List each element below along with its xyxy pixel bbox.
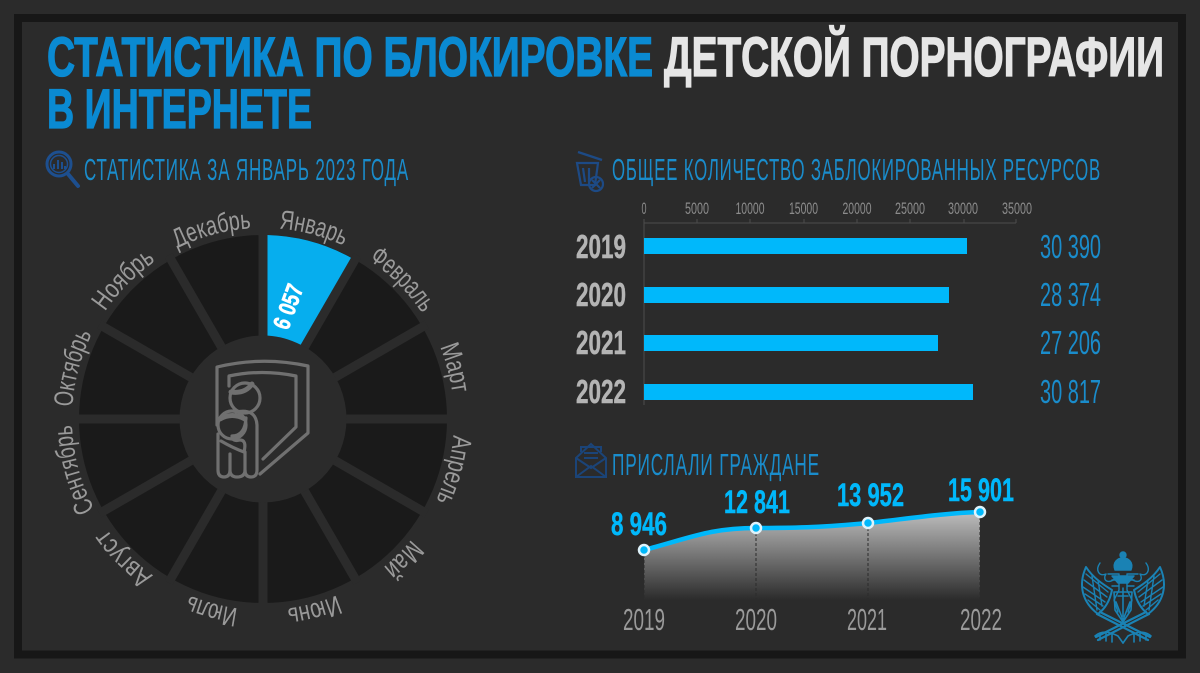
bar chart [576, 199, 1101, 410]
year axis labels: 2022 [960, 602, 1002, 637]
year labels: 2019 [576, 228, 626, 265]
month labels: Март [440, 342, 466, 391]
axis ticks labels: 5000 [685, 199, 709, 218]
year axis labels: 2019 [623, 602, 665, 637]
axis ticks labels: 20000 [842, 199, 872, 218]
month labels: Август [96, 532, 153, 586]
title: В ИНТЕРНЕТЕ [47, 77, 312, 140]
month labels: Январь [280, 210, 345, 244]
month labels: Октябрь [54, 332, 90, 406]
axis ticks labels: 25000 [895, 199, 925, 218]
data values: 12 841 [724, 484, 790, 520]
title [47, 25, 1164, 140]
month labels: Декабрь [173, 212, 250, 253]
heading: January statistics: СТАТИСТИКА ЗА ЯНВАРЬ 2023 ГОДА [84, 152, 409, 187]
value labels: 28 374 [1040, 276, 1101, 313]
axis ticks labels: 35000 [1002, 199, 1032, 218]
icon: envelope [576, 444, 606, 477]
month labels [54, 210, 472, 626]
data values: 15 901 [948, 472, 1014, 508]
year labels: 2021 [576, 324, 626, 361]
month labels: Июль [188, 596, 236, 626]
icon: shield with adult and child [217, 361, 308, 477]
axis ticks labels: 30000 [948, 199, 978, 218]
value labels: 30 817 [1040, 373, 1101, 410]
data values [611, 472, 1014, 542]
year labels [576, 228, 626, 410]
year axis labels [623, 602, 1002, 637]
month labels: Февраль [373, 248, 430, 312]
axis ticks labels [642, 199, 1032, 218]
value labels [1040, 228, 1101, 410]
month labels: Апрель [438, 435, 472, 502]
data values: 8 946 [611, 506, 667, 542]
month labels: Июнь [288, 596, 342, 622]
axis ticks labels: 15000 [789, 199, 818, 218]
title: СТАТИСТИКА ПО БЛОКИРОВКЕ [47, 25, 653, 88]
axis ticks labels: 0 [642, 199, 646, 218]
year labels: 2020 [576, 276, 626, 313]
january segment [268, 235, 351, 345]
month wheel [54, 210, 472, 626]
january value: 6 057 [268, 281, 309, 333]
value labels: 30 390 [1040, 228, 1101, 265]
month labels: Сентябрь [54, 426, 92, 514]
axis ticks labels: 10000 [736, 199, 764, 218]
month labels: Май [384, 540, 424, 582]
bars [644, 238, 973, 400]
area line chart [611, 472, 1014, 637]
year axis labels: 2020 [735, 602, 777, 637]
icon: magnifier with chart [47, 152, 78, 186]
data values: 13 952 [837, 477, 904, 513]
month labels: Ноябрь [91, 254, 154, 310]
icon: trash bin [577, 152, 603, 191]
year labels: 2022 [576, 373, 626, 410]
value labels: 27 206 [1040, 324, 1101, 361]
emblem: double-headed eagle [1082, 552, 1164, 643]
heading: sent by citizens: ПРИСЛАЛИ ГРАЖДАНЕ [612, 447, 820, 482]
data points [639, 507, 985, 555]
year axis labels: 2021 [847, 602, 887, 637]
